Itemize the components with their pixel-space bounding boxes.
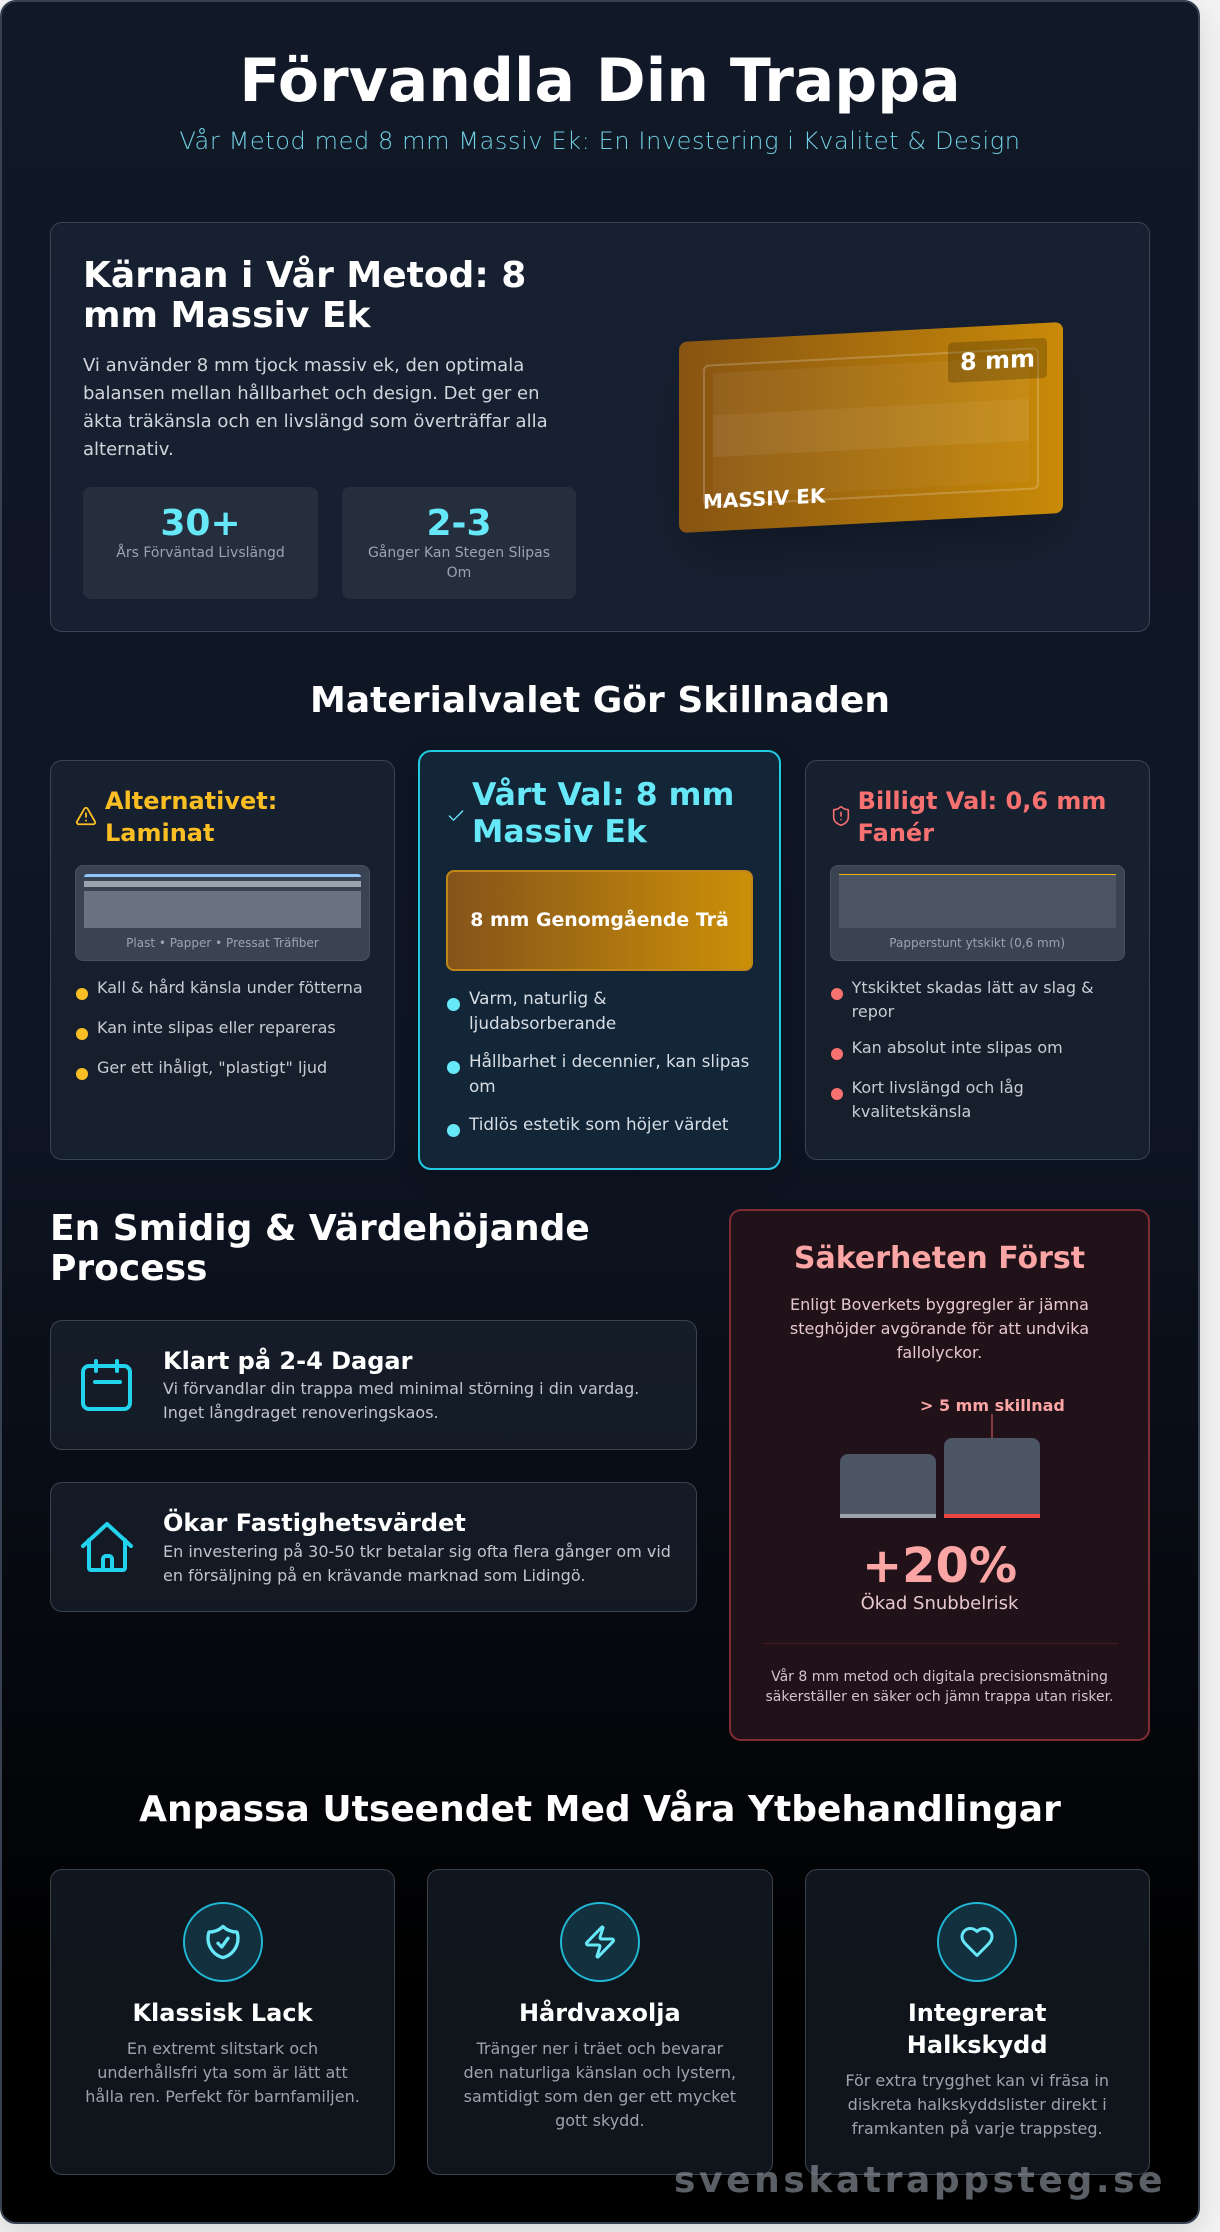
stat label: Om bbox=[447, 565, 471, 581]
text: fast delivery: Inget långdraget renoveringskaos. bbox=[163, 1403, 439, 1422]
text: hard wax oil bbox=[464, 2039, 736, 2130]
stat number: 30+ bbox=[160, 503, 241, 544]
panel: fast delivery bbox=[50, 1320, 697, 1450]
stat label: Gånger Kan Stegen Slipas bbox=[368, 545, 550, 561]
diagram: solid wood: 8 mm Genomgående Trä bbox=[470, 909, 729, 931]
text: safety conclusion bbox=[765, 1668, 1114, 1705]
heading: veneer: Billigt Val: 0,6 mm bbox=[858, 786, 1106, 814]
icon: shield alert bbox=[832, 806, 850, 826]
heading: anti-slip: Integrerat bbox=[908, 1999, 1046, 2027]
dot bbox=[831, 1088, 843, 1100]
panel: property value bbox=[50, 1482, 697, 1612]
dot bbox=[831, 988, 843, 1000]
caption: Plast • Papper • Pressat Träfiber bbox=[126, 936, 319, 950]
text: hard wax oil: Tränger ner i träet och bevarar bbox=[476, 2039, 723, 2058]
heading: anti-slip: Halkskydd bbox=[907, 2031, 1048, 2059]
fibre layer bbox=[84, 891, 361, 928]
text: property value bbox=[163, 1542, 671, 1585]
point: Hållbarhet i decennier, kan slipas bbox=[469, 1051, 749, 1071]
label: height difference: > 5 mm skillnad bbox=[920, 1396, 1065, 1414]
heading: our choice: Massiv Ek bbox=[472, 814, 647, 850]
text: safety rules: steghöjder avgörande för att undvika bbox=[790, 1319, 1089, 1338]
title: Förvandla Din Trappa bbox=[239, 46, 961, 116]
material label: MASSIV EK bbox=[703, 483, 825, 513]
heading: veneer bbox=[858, 786, 1106, 846]
heading: anti-slip bbox=[907, 1999, 1048, 2059]
paper layer bbox=[84, 881, 361, 887]
icon: heart bbox=[937, 1902, 1017, 1982]
stat label bbox=[368, 544, 550, 581]
text: safety rules: Enligt Boverkets byggregler är jämna bbox=[790, 1295, 1089, 1314]
caption: Papperstunt ytskikt (0,6 mm) bbox=[889, 936, 1065, 950]
text: safety conclusion: Vår 8 mm metod och digitala precisionsmätning bbox=[771, 1669, 1108, 1685]
point: Kan absolut inte slipas om bbox=[852, 1038, 1063, 1057]
point: repor bbox=[852, 1002, 894, 1021]
text: anti-slip: diskreta halkskyddslister direkt i bbox=[848, 2095, 1107, 2114]
thickness tag bbox=[948, 337, 1047, 382]
stat: trip risk: +20% bbox=[862, 1538, 1017, 1594]
heading: core method: Kärnan i Vår Metod: 8 bbox=[83, 255, 526, 296]
subtitle: Vår Metod med 8 mm Massiv Ek: En Investering i Kvalitet & Design bbox=[179, 127, 1021, 155]
text: hard wax oil: den naturliga känslan och lystern, bbox=[464, 2063, 736, 2082]
icon: shield check bbox=[183, 1902, 263, 1982]
diagram: veneer layers bbox=[830, 865, 1125, 961]
heading: finishes: Anpassa Utseendet Med Våra Ytbehandlingar bbox=[139, 1789, 1061, 1830]
watermark: svenskatrappsteg.se bbox=[674, 2160, 1166, 2201]
point: Kort livslängd och låg bbox=[852, 1078, 1024, 1097]
text: hard wax oil: samtidigt som den ger ett mycket bbox=[464, 2087, 736, 2106]
inner outline bbox=[703, 347, 1039, 506]
point: Tidlös estetik som höjer värdet bbox=[469, 1114, 729, 1134]
bolt glyph bbox=[585, 1925, 615, 1959]
heading: laminate: Alternativet: bbox=[105, 786, 277, 814]
panel: laminate bbox=[50, 760, 395, 1160]
point: Varm, naturlig & bbox=[469, 988, 607, 1008]
raised step bbox=[944, 1438, 1040, 1518]
text: core method description: alternativ. bbox=[83, 439, 174, 460]
icon: check bbox=[448, 810, 464, 821]
text: safety rules bbox=[790, 1295, 1089, 1362]
heading: material choice: Materialvalet Gör Skillnaden bbox=[310, 680, 890, 721]
veneer layer bbox=[839, 874, 1116, 875]
heading: lacquer: Klassisk Lack bbox=[132, 1999, 313, 2027]
text: lacquer: underhållsfri yta som är lätt att bbox=[97, 2063, 348, 2082]
diagram: laminate layers bbox=[75, 865, 370, 961]
stat: lifespan bbox=[83, 487, 318, 599]
diagram: solid wood bbox=[446, 870, 753, 971]
panel: veneer bbox=[805, 760, 1150, 1160]
plastic layer bbox=[84, 874, 361, 877]
text: anti-slip bbox=[845, 2071, 1109, 2138]
icon: house bbox=[80, 1522, 134, 1572]
text: core method description: Vi använder 8 mm tjock massiv ek, den optimala bbox=[83, 354, 524, 376]
point: om bbox=[469, 1076, 496, 1096]
wood grain band bbox=[713, 398, 1029, 457]
point: Kan inte slipas eller repareras bbox=[97, 1018, 336, 1037]
point: Ytskiktet skadas lätt av slag & bbox=[852, 978, 1094, 997]
heading: laminate: Laminat bbox=[105, 818, 214, 846]
stat label: Års Förväntad Livslängd bbox=[116, 545, 285, 561]
dot bbox=[76, 988, 88, 1000]
panel: safety bbox=[729, 1208, 1150, 1740]
text: fast delivery: Vi förvandlar din trappa med minimal störning i din vardag. bbox=[163, 1379, 639, 1398]
point bbox=[469, 1051, 749, 1096]
text: core method description: balansen mellan hållbarhet och design. Det ger en bbox=[83, 383, 540, 404]
panel: anti-slip bbox=[805, 1869, 1150, 2175]
wood grain top bbox=[713, 356, 1029, 415]
heading: our choice bbox=[472, 777, 734, 850]
point bbox=[469, 988, 616, 1033]
text: safety conclusion: säkerställer en säker och jämn trappa utan risker. bbox=[765, 1689, 1114, 1705]
point: kvalitetskänsla bbox=[852, 1102, 971, 1121]
text: hard wax oil: gott skydd. bbox=[555, 2111, 645, 2130]
stat number: 2-3 bbox=[426, 503, 492, 544]
dot bbox=[831, 1048, 843, 1060]
divider bbox=[764, 1642, 1118, 1644]
heading: core method bbox=[83, 255, 526, 336]
wood grain bottom bbox=[713, 440, 1029, 498]
heart glyph bbox=[960, 1927, 994, 1958]
icon: warning bbox=[76, 806, 96, 826]
text: lacquer: En extremt slitstark och bbox=[127, 2039, 318, 2058]
text: anti-slip: framkanten på varje trappsteg. bbox=[852, 2119, 1103, 2138]
dot bbox=[446, 998, 460, 1011]
dot bbox=[76, 1068, 88, 1080]
heading: veneer: Fanér bbox=[858, 818, 934, 846]
panel: lacquer bbox=[50, 1869, 395, 2175]
text: lacquer: hålla ren. Perfekt för barnfamiljen. bbox=[85, 2087, 360, 2106]
text: lacquer bbox=[85, 2039, 360, 2106]
dot bbox=[76, 1028, 88, 1040]
heading: process: En Smidig & Värdehöjande bbox=[50, 1208, 590, 1249]
illustration: oak tread bbox=[679, 321, 1063, 533]
text: core method description: äkta träkänsla och en livslängd som överträffar alla bbox=[83, 411, 548, 432]
text: fast delivery bbox=[163, 1379, 639, 1422]
dot bbox=[446, 1061, 460, 1074]
panel: core method bbox=[50, 222, 1150, 632]
text: safety rules: fallolyckor. bbox=[897, 1343, 982, 1362]
point bbox=[852, 978, 1094, 1021]
chart: uneven steps bbox=[840, 1396, 1065, 1518]
heading: hard wax oil: Hårdvaxolja bbox=[519, 1999, 681, 2027]
icon: bolt bbox=[560, 1902, 640, 1982]
panel: our choice bbox=[418, 750, 781, 1170]
panel: hard wax oil bbox=[427, 1869, 773, 2175]
even step bbox=[840, 1454, 936, 1518]
substrate layer bbox=[839, 875, 1116, 928]
point: ljudabsorberande bbox=[469, 1013, 616, 1033]
point bbox=[852, 1078, 1024, 1121]
heading: laminate bbox=[105, 786, 277, 846]
heading: our choice: Vårt Val: 8 mm bbox=[472, 777, 734, 813]
text: property value: En investering på 30-50 tkr betalar sig ofta flera gånger om vid bbox=[163, 1542, 671, 1561]
thickness tag: 8 mm bbox=[960, 344, 1035, 376]
point: Ger ett ihåligt, "plastigt" ljud bbox=[97, 1058, 327, 1077]
marker line bbox=[991, 1414, 993, 1438]
stat: sanding times bbox=[342, 487, 576, 599]
text: anti-slip: För extra trygghet kan vi fräsa in bbox=[845, 2071, 1109, 2090]
heading: safety: Säkerheten Först bbox=[794, 1241, 1085, 1276]
stat label: Ökad Snubbelrisk bbox=[861, 1592, 1018, 1614]
dot bbox=[446, 1124, 460, 1137]
text: property value: en försäljning på en krävande marknad som Lidingö. bbox=[163, 1566, 585, 1585]
heading: fast delivery: Klart på 2-4 Dagar bbox=[163, 1347, 412, 1375]
heading: core method: mm Massiv Ek bbox=[83, 295, 370, 336]
heading: process bbox=[50, 1208, 590, 1289]
point: Kall & hård känsla under fötterna bbox=[97, 978, 363, 997]
heading: process: Process bbox=[50, 1248, 207, 1289]
text: core method description bbox=[83, 354, 548, 460]
heading: property value: Ökar Fastighetsvärdet bbox=[163, 1509, 466, 1537]
icon: calendar bbox=[81, 1359, 132, 1411]
shield glyph bbox=[206, 1924, 240, 1960]
